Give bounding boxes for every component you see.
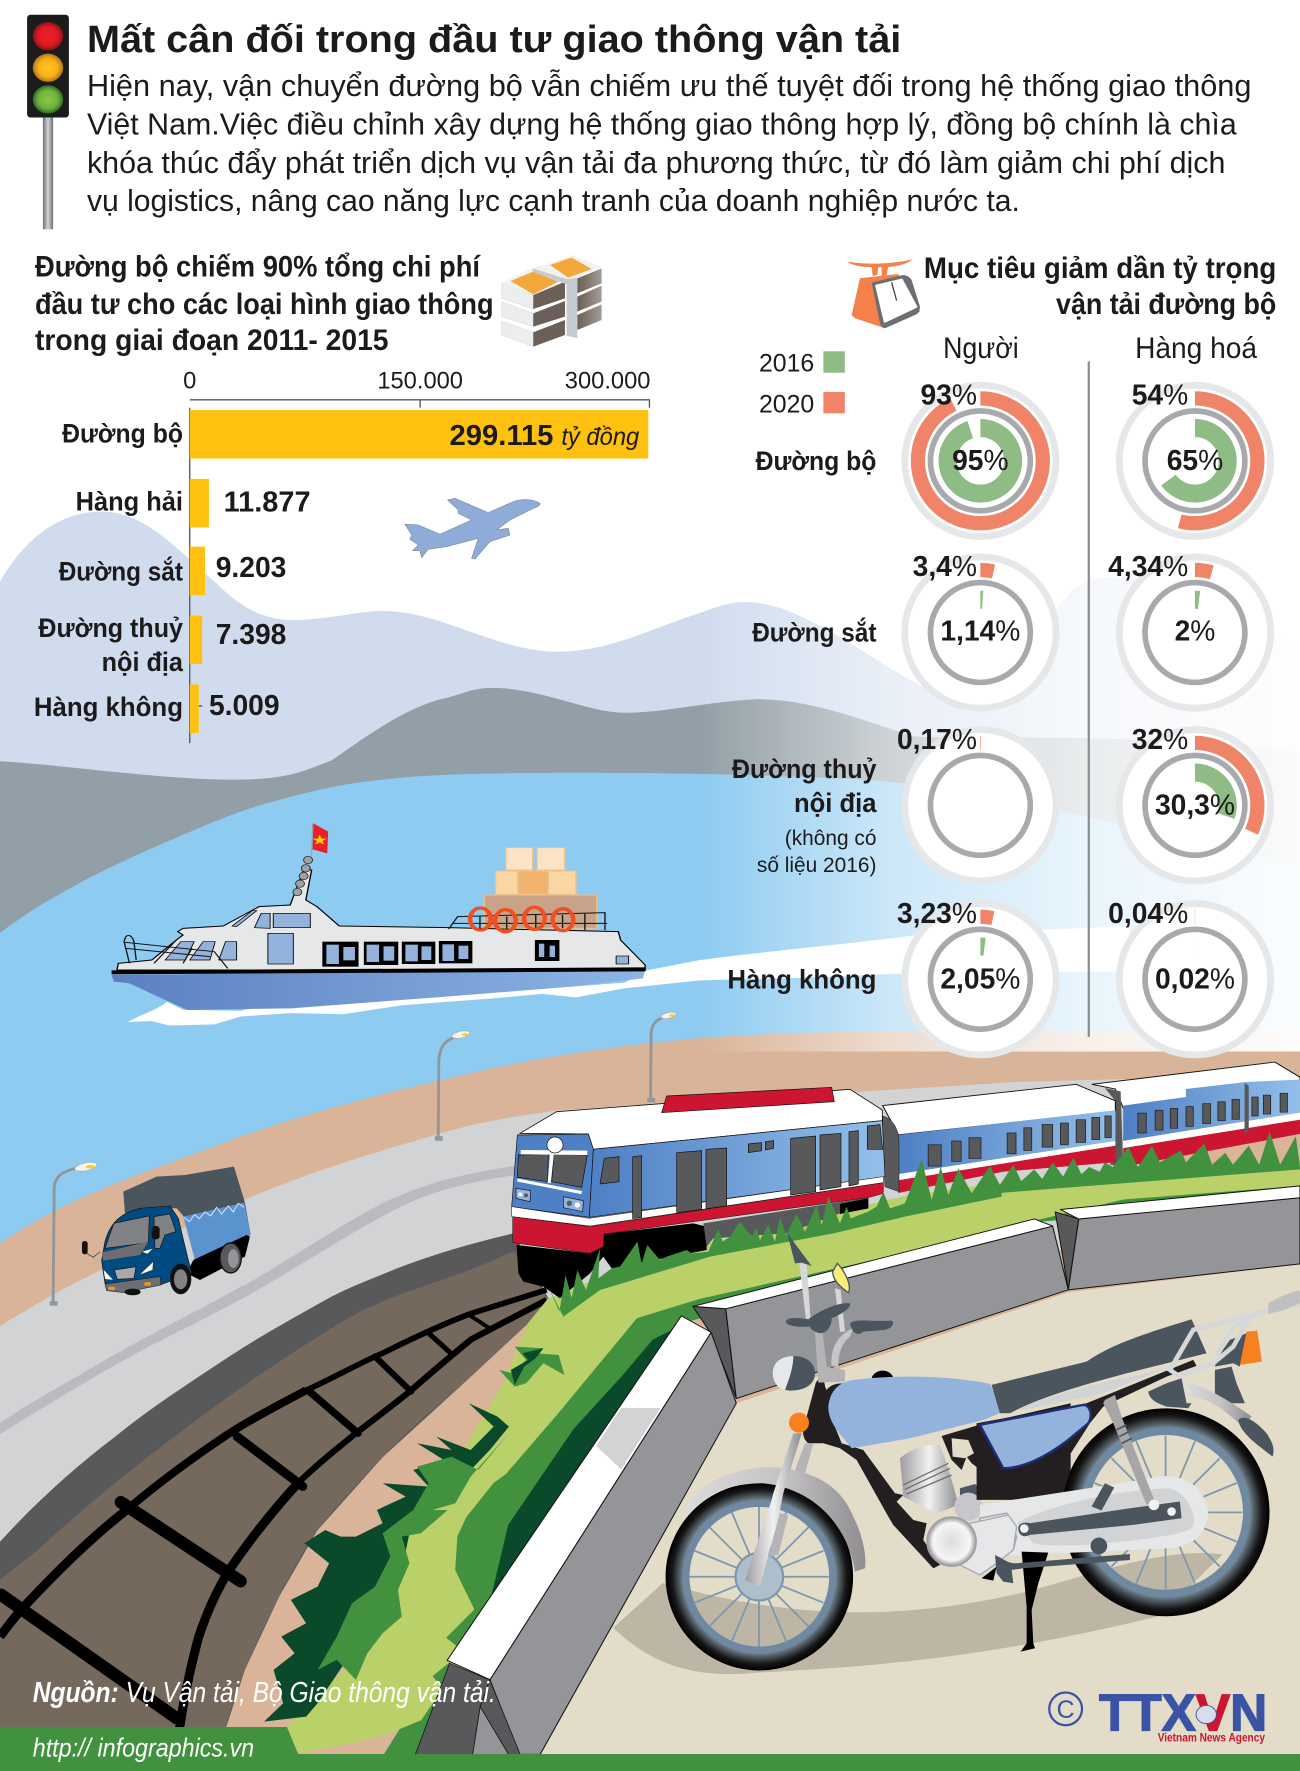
engine crankcase xyxy=(927,1515,1130,1652)
intro paragraph xyxy=(87,68,1251,218)
side panel xyxy=(980,1405,1091,1468)
donut: air freight xyxy=(1108,897,1271,1055)
column headings: Hàng hoá xyxy=(1135,332,1258,365)
website link: http:// infographics.vn xyxy=(33,1732,254,1762)
second carriage xyxy=(883,1084,1115,1193)
icon: money stacks xyxy=(502,255,602,347)
barrier end near the footer xyxy=(415,1663,520,1755)
pavement and curbs xyxy=(540,1264,1300,1754)
panel: road freight share targets xyxy=(727,252,1276,1055)
ship cabin xyxy=(117,870,645,970)
donut: rail freight: 2% xyxy=(1175,614,1215,646)
engine cylinder xyxy=(900,1445,958,1513)
train xyxy=(512,1062,1300,1317)
grass tufts near locomotive xyxy=(548,1159,1002,1317)
donut: air freight: 0,04% xyxy=(1108,897,1188,929)
mast lights xyxy=(293,856,313,896)
intro paragraph: Hiện nay, vận chuyển đường bộ vẫn chiếm ưu thế tuyệt đối trong hệ thống giao thông xyxy=(87,68,1251,103)
tail light xyxy=(1240,1331,1262,1365)
headlight xyxy=(773,1356,815,1391)
donut: inland waterway passengers: 0,17% xyxy=(897,723,977,755)
footer green bar xyxy=(0,1727,1300,1771)
axis labels xyxy=(183,369,650,395)
donut: inland waterway freight: 30,3% xyxy=(1155,788,1235,820)
row labels: Hàng không xyxy=(727,963,876,994)
bar labels: Đường bộ xyxy=(62,418,183,449)
donut: inland waterway freight xyxy=(1119,723,1271,881)
front half of the bike xyxy=(683,1233,1071,1587)
logo: TTXVN: C xyxy=(1057,1697,1075,1724)
donut: air passengers: 3,23% xyxy=(897,897,977,929)
panel: investment chart xyxy=(34,251,650,743)
donut: road freight xyxy=(1119,378,1271,536)
bar labels xyxy=(34,418,184,722)
logo: TTXVN: Vietnam News Agency xyxy=(1158,1731,1265,1745)
cargo boxes xyxy=(484,848,597,928)
row labels: Đường sắt xyxy=(752,617,876,648)
row labels: số liệu 2016) xyxy=(757,854,876,877)
swing arm xyxy=(1018,1502,1182,1536)
row labels: (không có xyxy=(785,827,876,850)
axis labels: 150.000 xyxy=(377,369,463,395)
cable arc xyxy=(831,1328,853,1367)
title: Mất cân đối trong đầu tư giao thông vận tải xyxy=(87,18,901,61)
mirror stems xyxy=(799,1263,845,1332)
donut: rail passengers: 3,4% xyxy=(913,550,977,582)
chart heading: trong giai đoạn 2011- 2015 xyxy=(35,324,389,357)
traffic light icon xyxy=(27,15,69,229)
street lamps xyxy=(50,1011,677,1306)
donut: road passengers: 95% xyxy=(952,444,1009,476)
ship windows xyxy=(322,940,559,967)
donut: inland waterway freight: 32% xyxy=(1132,723,1188,755)
third carriage xyxy=(1092,1062,1300,1167)
donut: rail passengers xyxy=(905,550,1056,708)
filler cap xyxy=(872,1371,893,1378)
panel heading xyxy=(924,252,1276,321)
fuel tank xyxy=(828,1377,1003,1448)
chart heading: đầu tư cho các loại hình giao thông xyxy=(35,288,494,321)
rear shock xyxy=(1103,1395,1155,1505)
bar values: 7.398 xyxy=(216,618,286,650)
icon: weighing scale xyxy=(847,259,920,328)
donut: road passengers: 93% xyxy=(920,378,977,410)
bar labels: Hàng không xyxy=(34,691,183,722)
bar labels: Đường sắt xyxy=(59,556,183,587)
rear frame xyxy=(977,1360,1197,1500)
row labels: nội địa xyxy=(794,787,877,818)
bar labels: Đường thuỷ xyxy=(38,612,183,643)
donut: air passengers: 2,05% xyxy=(940,962,1020,994)
truck xyxy=(82,1167,251,1295)
donut: inland waterway passengers xyxy=(897,723,1056,881)
panel heading: vận tải đường bộ xyxy=(1056,288,1276,321)
fork upper and brace xyxy=(815,1332,845,1383)
intro paragraph: khóa thúc đẩy phát triển dịch vụ vận tải đa phương thức, từ đó làm giảm chi phí dịch xyxy=(87,146,1225,180)
donut: air freight: 0,02% xyxy=(1155,962,1235,994)
intro paragraph: vụ logistics, nâng cao năng lực cạnh tranh của doanh nghiệp nước ta. xyxy=(87,184,1020,218)
donut: rail passengers: 1,14% xyxy=(940,614,1020,646)
turn signal xyxy=(789,1413,809,1433)
logo: TTXVN: TTXVN xyxy=(1099,1684,1267,1742)
bar chart xyxy=(190,400,649,743)
front wheel xyxy=(666,1483,853,1670)
front mudguard xyxy=(683,1467,865,1572)
rear mudguard xyxy=(1185,1382,1252,1427)
front fork xyxy=(745,1433,802,1587)
source line: Nguồn: Vụ Vận tải, Bộ Giao thông vận tải. xyxy=(33,1676,496,1708)
locomotive windows and doors xyxy=(517,1125,883,1219)
icon: Vietnam flag xyxy=(312,823,328,857)
chart heading xyxy=(35,251,494,357)
donut: road passengers xyxy=(905,378,1056,536)
legend: 2016 xyxy=(759,351,814,378)
column divider xyxy=(1088,361,1090,1037)
ship railings xyxy=(124,913,607,968)
foot rest xyxy=(995,1554,1130,1583)
bar values: 9.203 xyxy=(216,551,286,583)
rear rack xyxy=(1170,1310,1270,1377)
legend: 2020 xyxy=(759,391,814,418)
column headings: Người xyxy=(943,332,1019,365)
locomotive xyxy=(512,1087,1002,1317)
grass embankment xyxy=(264,1167,1300,1754)
under-seat rail xyxy=(1017,1367,1170,1410)
motorbike xyxy=(666,1233,1300,1670)
bar values: 299.115 xyxy=(450,419,553,451)
road, dark verge, ballast xyxy=(0,1079,1141,1771)
bar values: 5.009 xyxy=(209,689,280,721)
bike frame xyxy=(803,1379,940,1568)
axis labels: 0 xyxy=(183,369,196,395)
rear carriages xyxy=(883,1062,1300,1193)
seat xyxy=(992,1319,1207,1413)
row labels xyxy=(727,445,877,994)
concrete road barriers xyxy=(447,1186,1300,1754)
left mirror xyxy=(787,1233,812,1266)
rear wheel xyxy=(1062,1408,1270,1616)
bar values: tỷ đồng xyxy=(561,424,639,451)
tail bracket xyxy=(1215,1333,1247,1403)
fade overlay on the right xyxy=(700,542,1300,1052)
row labels: Đường bộ xyxy=(756,445,876,476)
chain case xyxy=(980,1476,1208,1555)
ship wake xyxy=(128,926,1129,1026)
panel heading: Mục tiêu giảm dần tỷ trọng xyxy=(924,252,1276,285)
chart heading: Đường bộ chiếm 90% tổng chi phí xyxy=(35,251,481,284)
grass tufts along carriages xyxy=(999,1132,1300,1193)
axis labels: 300.000 xyxy=(565,369,650,395)
railway track xyxy=(0,1290,547,1728)
kick stand xyxy=(1021,1552,1048,1652)
legend xyxy=(759,351,845,418)
donut: road freight: 65% xyxy=(1167,444,1223,476)
donut: road freight: 54% xyxy=(1132,378,1188,410)
bar labels: nội địa xyxy=(102,646,184,677)
donut: air passengers xyxy=(897,897,1056,1055)
column headings xyxy=(943,332,1258,365)
row labels: Đường thuỷ xyxy=(732,753,876,784)
ship xyxy=(112,823,645,1010)
donut: rail freight: 4,34% xyxy=(1108,550,1188,582)
bar labels: Hàng hải xyxy=(76,486,183,517)
right mirror xyxy=(833,1263,849,1293)
fork lower tube xyxy=(768,1443,813,1557)
intro paragraph: Việt Nam.Việc điều chỉnh xây dựng hệ thống giao thông hợp lý, đồng bộ chính là chìa xyxy=(87,107,1237,141)
airplane xyxy=(405,498,540,559)
handlebars xyxy=(786,1303,893,1334)
life rings xyxy=(470,907,573,932)
bar values xyxy=(209,419,639,721)
bar values: 11.877 xyxy=(224,486,311,518)
donut: rail freight xyxy=(1108,550,1271,708)
rear half of the bike xyxy=(977,1291,1300,1555)
